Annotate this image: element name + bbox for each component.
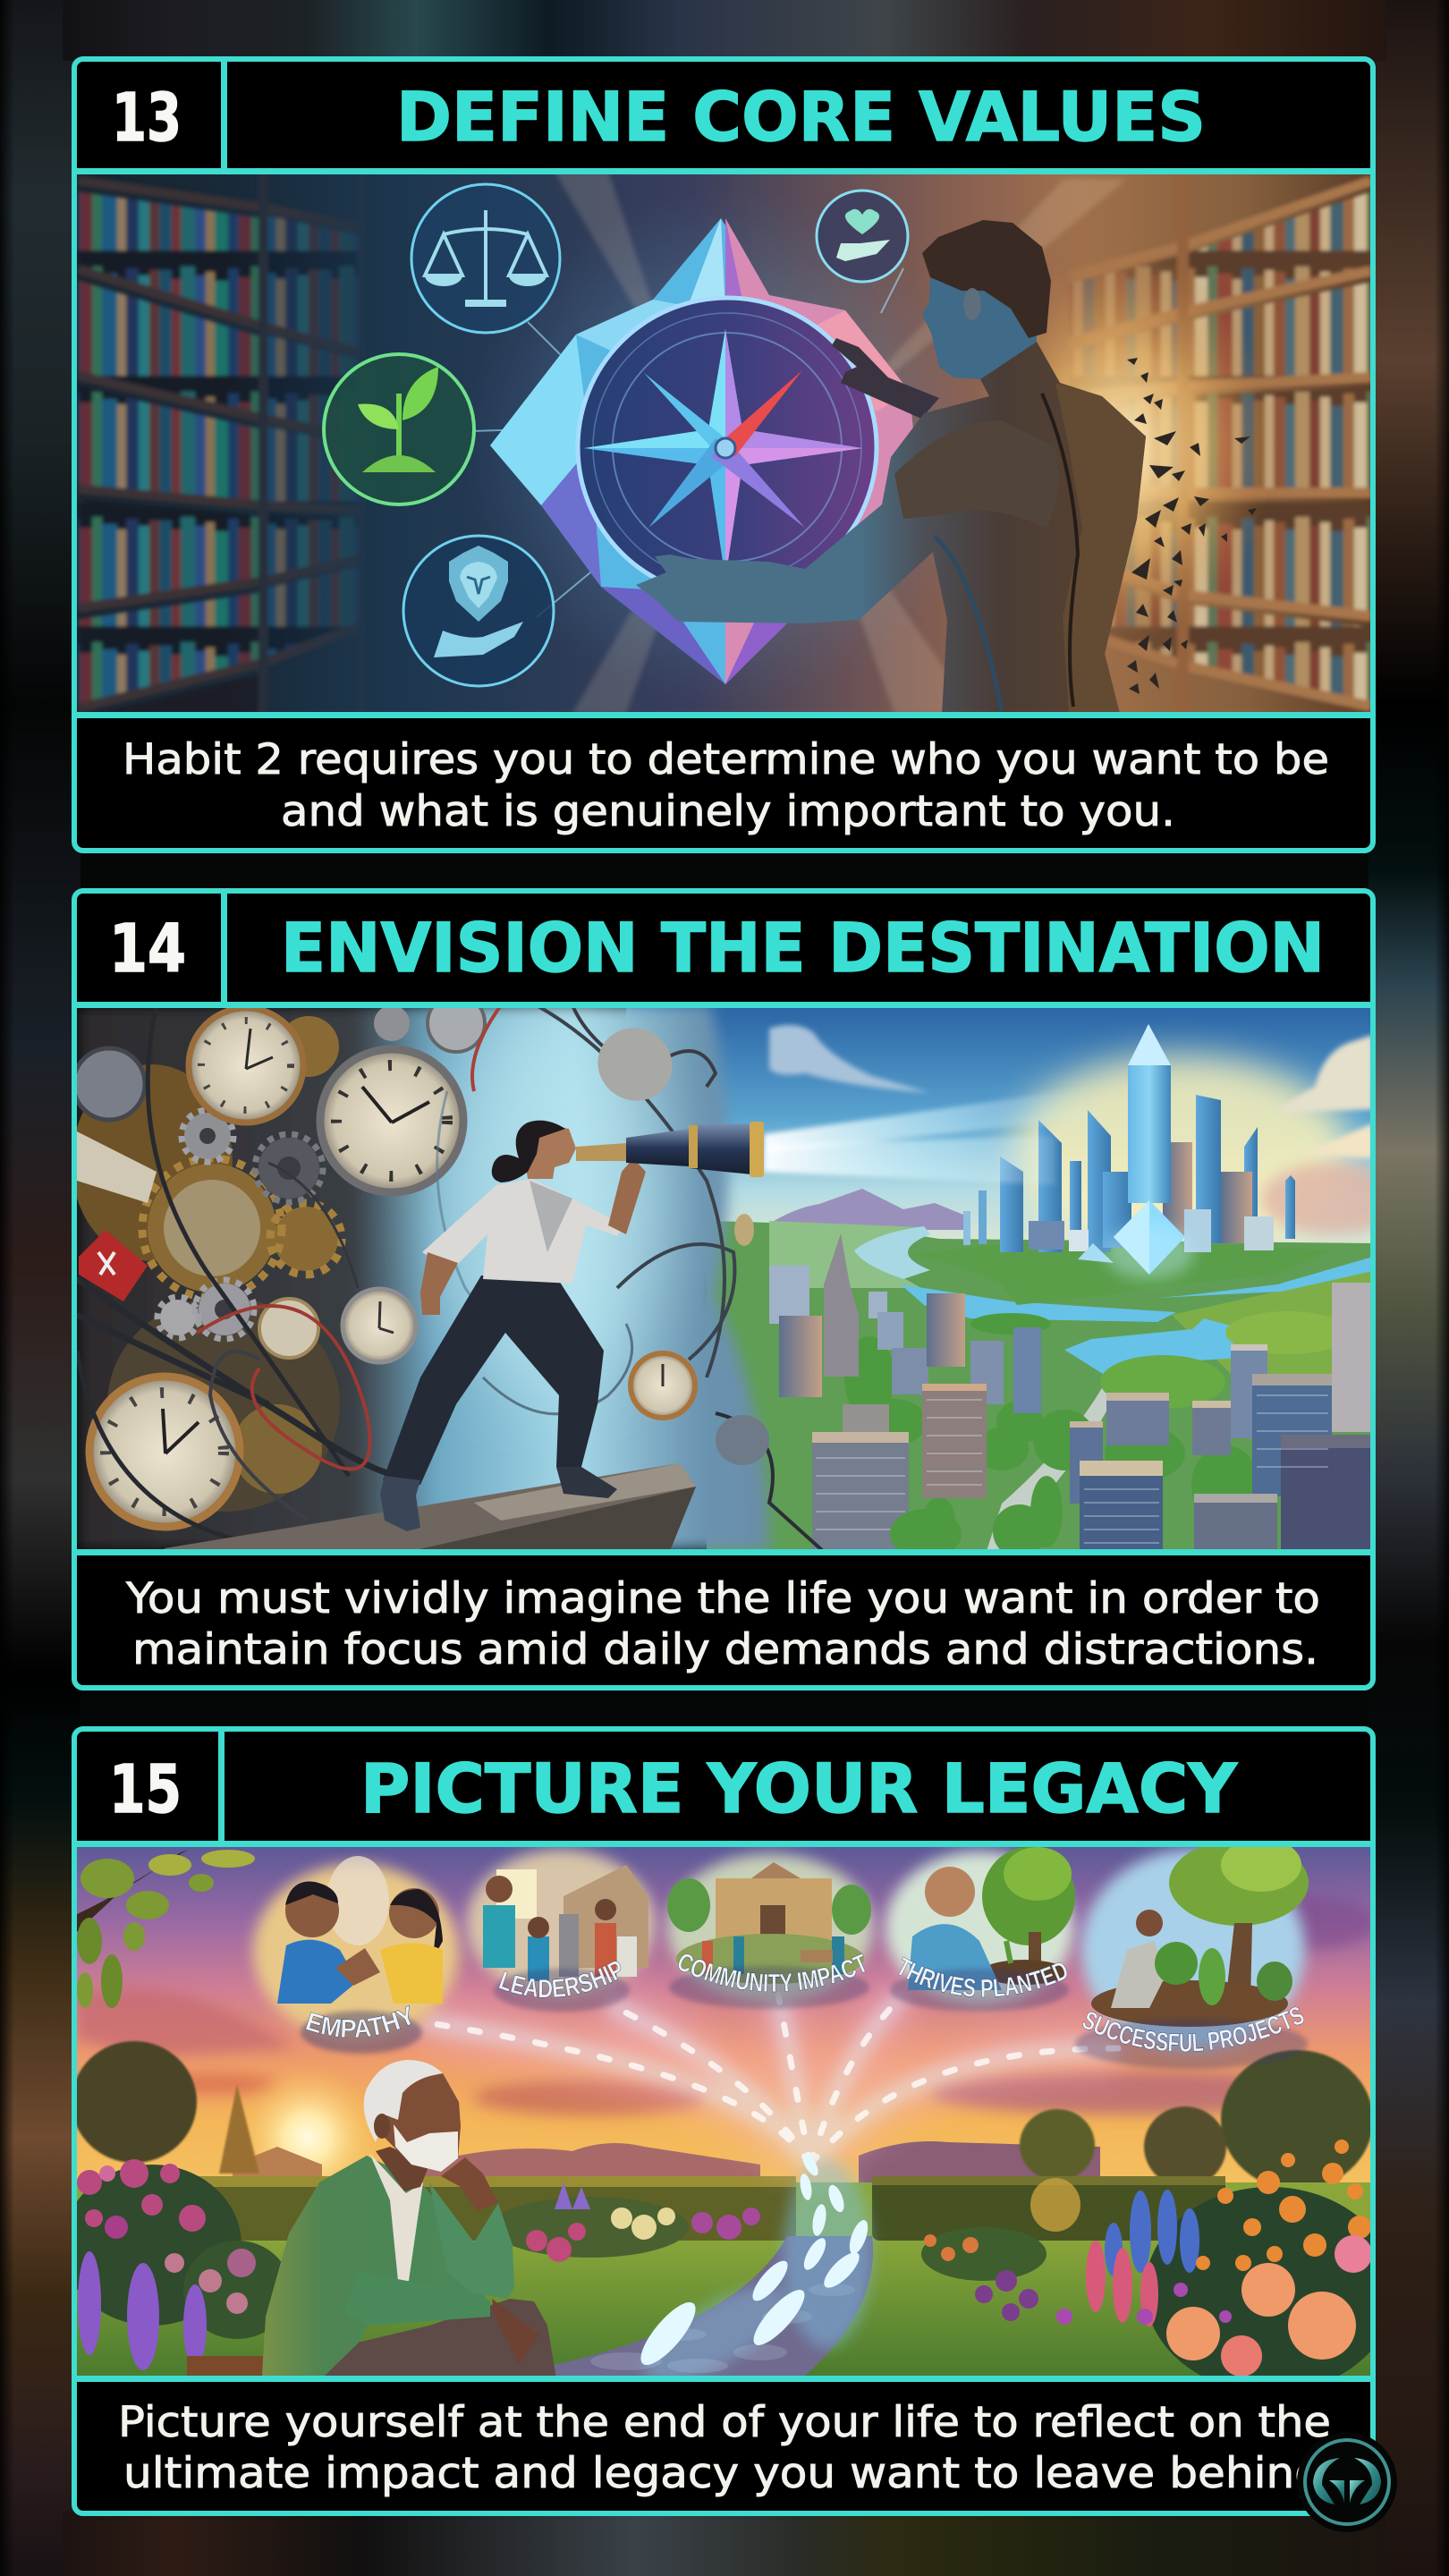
elderly man sitting	[262, 2060, 556, 2379]
neck	[376, 2147, 429, 2191]
memory bubble: empathy	[253, 1856, 459, 2039]
sleeve arm	[429, 2182, 514, 2299]
crystal city skyline	[963, 1024, 1295, 1279]
number 13: 13	[112, 80, 182, 157]
chin hand	[441, 2157, 498, 2211]
face	[922, 259, 1037, 379]
sun	[232, 2062, 384, 2214]
trousers	[325, 2299, 556, 2379]
panel 14: envision the destination	[72, 891, 1404, 1688]
curved bubble labels	[301, 1947, 1309, 2069]
near city buildings and trees	[769, 1233, 1373, 1559]
dissolving back	[1055, 383, 1146, 714]
heading: envision the destination: ENVISION THE DESTINATION	[281, 908, 1325, 987]
caption text: and what is genuinely important to you.	[281, 787, 1175, 836]
caption text	[118, 2398, 1337, 2498]
light rays and glow behind compass	[466, 172, 1275, 714]
left flower beds	[63, 2159, 760, 2376]
light beam from telescope	[764, 1087, 1096, 1185]
right flower beds	[921, 2140, 1395, 2393]
clouds	[769, 1025, 1373, 1158]
green land	[707, 1221, 1373, 1551]
icon circle: growing plant	[324, 354, 474, 504]
horizon glow behind city	[1011, 1055, 1351, 1252]
illustration: woman with telescope between chaos and a crystal city	[72, 995, 1404, 1559]
curved bubble labels: SUCCESSFUL PROJECTS	[1078, 2001, 1309, 2058]
documents and red warning sign	[77, 1131, 157, 1301]
woman with telescope	[380, 1121, 764, 1531]
shirt	[422, 1179, 624, 1284]
beard	[394, 2124, 458, 2172]
bookshelves: right warm library	[1061, 172, 1371, 714]
number 15: 15	[109, 1751, 182, 1828]
crystal compass	[490, 218, 918, 684]
sunset clouds	[77, 1896, 1377, 2115]
heading: picture your legacy: PICTURE YOUR LEGACY	[360, 1749, 1238, 1828]
telescope	[576, 1143, 626, 1161]
distant mountains	[769, 1189, 963, 1230]
curved bubble labels: COMMUNITY IMPACT	[678, 1953, 866, 1993]
caption text: maintain focus amid daily demands and distractions.	[132, 1625, 1318, 1674]
illustration: elderly man in a garden with glowing footprints	[63, 1838, 1395, 2401]
icon circle: lion and hand	[403, 536, 554, 686]
header row and dividers	[72, 891, 1376, 1687]
illustration: man reaching for a crystal compass in a library	[77, 172, 1373, 719]
memory bubble: successful projects	[1081, 1838, 1309, 2050]
panel 13: define core values	[72, 59, 1376, 851]
head	[523, 1123, 576, 1179]
panel 15: picture your legacy	[63, 1729, 1395, 2513]
arms	[420, 1252, 458, 1315]
background trees	[72, 2041, 1373, 2190]
dust particles	[1127, 358, 1257, 694]
caption text: Picture yourself at the end of your life to reflect on the	[118, 2398, 1331, 2447]
island	[912, 1241, 1332, 1305]
ground and hedges	[77, 2176, 1373, 2379]
branch and leaves top-left	[77, 1850, 255, 2008]
tangled wires	[77, 1005, 823, 1551]
caption text: Habit 2 requires you to determine who you want to be	[123, 735, 1329, 784]
curved bubble labels: THRIVES PLANTED	[898, 1957, 1068, 1998]
trousers	[383, 1275, 604, 1485]
ledge	[165, 1463, 696, 1551]
caption text	[125, 1574, 1320, 1674]
raised hand	[832, 338, 939, 419]
knee hand	[492, 2299, 539, 2364]
glowing footprint streams	[420, 1995, 1118, 2401]
curved bubble labels: LEADERSHIP	[498, 1961, 621, 1998]
lake and river	[854, 1226, 1373, 1551]
face	[380, 2073, 461, 2171]
header row and dividers	[72, 1729, 1376, 2512]
chaos background with blue glow around woman	[77, 1005, 769, 1551]
clocks and gears	[72, 995, 695, 1527]
icon circle: justice scales	[411, 184, 903, 617]
hair	[922, 220, 1051, 338]
man dissolving into dust	[636, 220, 1257, 714]
compass star	[584, 329, 862, 579]
number 14: 14	[109, 911, 186, 987]
hair	[364, 2060, 443, 2142]
caption text: You must vividly imagine the life you want in order to	[125, 1574, 1320, 1623]
bookshelves: left cool library	[78, 172, 366, 719]
header row and dividers	[72, 59, 1376, 850]
memory bubble: leadership	[467, 1850, 655, 1996]
curved bubble labels: EMPATHY	[306, 2005, 411, 2038]
icon circle: heart in hand	[817, 191, 908, 282]
memory bubble: thrives planted	[886, 1847, 1075, 2004]
caption text: ultimate impact and legacy you want to leave behind.	[123, 2449, 1337, 2498]
shirt	[369, 2153, 423, 2281]
logo badge	[1297, 2432, 1397, 2532]
cardigan body	[262, 2156, 490, 2376]
heading: define core values: DEFINE CORE VALUES	[396, 77, 1206, 157]
torso and arm	[636, 342, 1146, 714]
hills	[420, 2143, 760, 2182]
caption text	[123, 735, 1329, 836]
memory bubble: community impact	[667, 1854, 873, 2001]
